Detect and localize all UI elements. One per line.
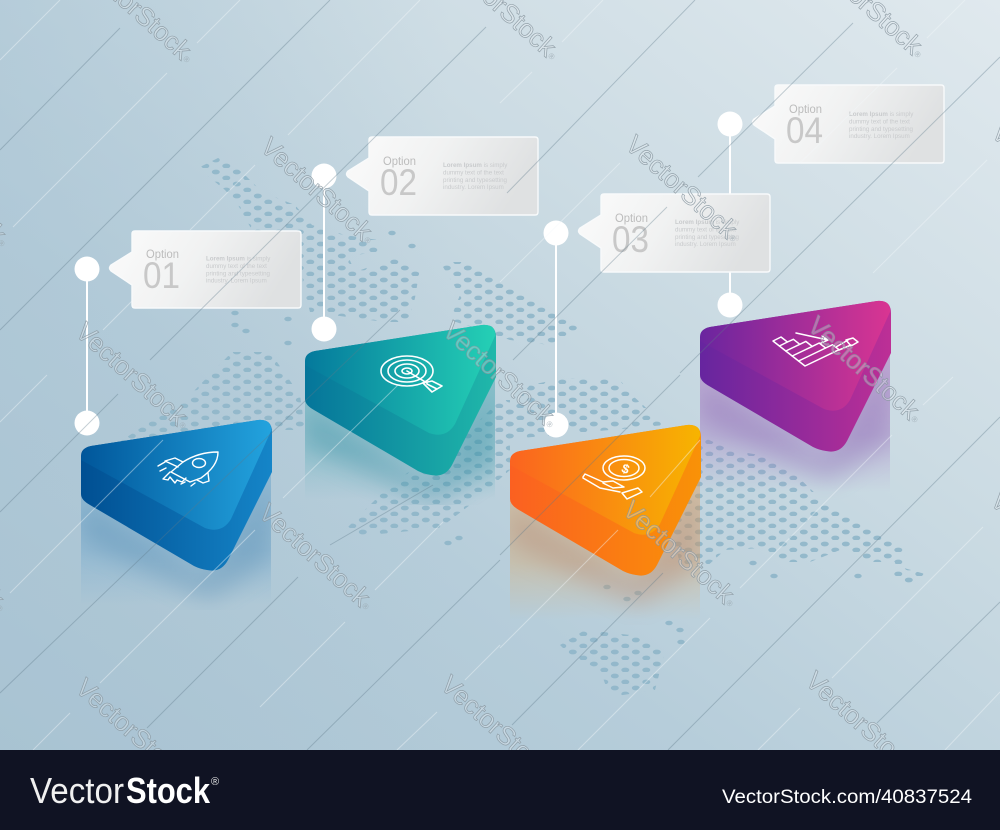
watermarks: ® [362, 235, 373, 246]
triangle: blue rocket [81, 420, 272, 571]
callout 1: 01 [143, 255, 180, 296]
reflection: blue [81, 470, 271, 605]
callout 2: Option [383, 154, 416, 168]
callout 3: dummy text of the text [675, 226, 736, 234]
reflection: purple [700, 350, 890, 492]
watermarks: ® [181, 54, 192, 65]
watermarks: VectorStock [800, 665, 924, 781]
watermarks: ® [912, 49, 923, 60]
callout 1: printing and typesetting [206, 270, 271, 277]
callout 2 [346, 137, 538, 215]
connector 3 [544, 220, 568, 438]
reflection: teal [305, 375, 495, 505]
callout 4: Lorem Ipsum is simply [849, 111, 913, 118]
icon: target with arrow [381, 356, 442, 392]
watermarks: VectorStock [802, 310, 925, 425]
watermarks: ® [546, 51, 557, 62]
watermarks: ® [360, 601, 371, 612]
callout 2: dummy text of the text [443, 170, 504, 176]
callout 3: Lorem Ipsum is simply [675, 219, 739, 226]
icon: hand holding coin: $ [620, 460, 632, 477]
callout 2: industry. Lorem Ipsum [443, 184, 504, 191]
callout 3: Option [615, 211, 648, 225]
callout 3: printing and typesetting [675, 234, 740, 241]
callout 2: 02 [380, 162, 417, 203]
watermarks: ® [724, 598, 735, 609]
callout 1: dummy text of the text [206, 263, 267, 270]
callout 4: industry. Lorem Ipsum [849, 133, 910, 140]
watermarks: VectorStock [255, 131, 378, 246]
callout 1 [110, 231, 301, 308]
watermarks: ® [177, 420, 188, 431]
callout 4: dummy text of the text [849, 118, 910, 126]
callout 3: industry. Lorem Ipsum [675, 241, 736, 248]
callout 2: printing and typesetting [443, 177, 508, 184]
watermarks: VectorStock [620, 129, 743, 244]
callout 4: Option [789, 102, 822, 116]
connector 2 [312, 164, 336, 342]
connector 1 [74, 256, 100, 436]
callout 1: industry. Lorem Ipsum [206, 278, 267, 285]
watermarks: VectorStock [437, 315, 560, 430]
footer logo: Stock: Stock [126, 770, 211, 811]
watermarks: VectorStock [70, 316, 193, 431]
registered mark: ® [211, 776, 219, 788]
callout 1: Option [146, 247, 179, 261]
callout 3 [578, 194, 770, 272]
world map dots [115, 156, 925, 697]
triangle: purple chart [700, 301, 891, 452]
callout 3: 03 [612, 219, 649, 260]
icon: hand holding coin [583, 456, 645, 499]
connector 4 [718, 112, 742, 318]
footer bar [0, 750, 1000, 830]
callout 4 [752, 85, 944, 163]
reflection: orange [510, 475, 700, 620]
watermarks: VectorStock [617, 494, 740, 609]
callout 2: Lorem Ipsum is simply [443, 162, 507, 169]
watermarks: ® [909, 414, 920, 425]
triangle: orange coin [510, 425, 701, 576]
footer id: VectorStock.com/40837524 [722, 786, 972, 808]
icon: rising isometric bar chart [773, 333, 858, 366]
callout 4: 04 [786, 110, 823, 151]
watermarks: ® [544, 419, 555, 430]
footer logo: Vector: Vector [30, 770, 124, 811]
watermarks: ® [727, 233, 738, 244]
watermarks: VectorStock [253, 497, 376, 612]
callout 4: printing and typesetting [849, 126, 914, 133]
triangle: teal target [305, 325, 496, 476]
watermarks: VectorStock [70, 672, 194, 788]
callout 1: Lorem Ipsum is simply [206, 256, 270, 262]
icon: rocket [158, 452, 218, 486]
watermarks: VectorStock [435, 669, 559, 785]
